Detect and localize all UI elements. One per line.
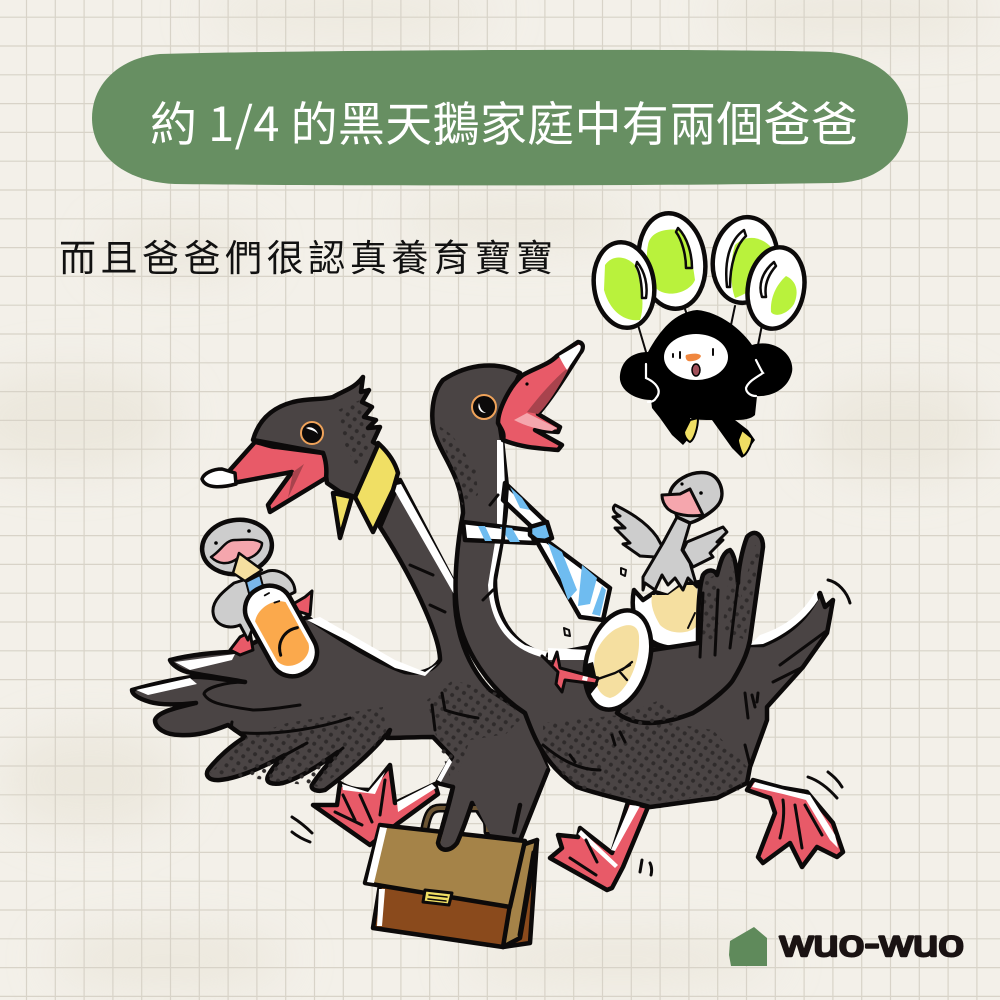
bottle <box>237 577 325 685</box>
baby swan on egg <box>613 473 727 590</box>
baby swan with bottle <box>199 515 325 685</box>
white highlights: left swan <box>136 484 455 782</box>
baby beak <box>662 489 703 516</box>
rear foot: right swan <box>747 780 843 867</box>
small motion marks <box>292 580 850 875</box>
beak: right swan <box>498 342 583 450</box>
balloon strings <box>638 300 762 352</box>
logo house icon <box>729 927 767 966</box>
baby arms and body <box>213 570 295 640</box>
head, neck and body <box>432 365 833 807</box>
briefcase lower <box>373 840 537 947</box>
tie <box>463 483 610 620</box>
leg and foot: left swan <box>313 765 438 845</box>
balloons <box>588 209 811 333</box>
black body <box>620 310 792 458</box>
feather lines: right swan <box>483 495 825 770</box>
large egg <box>573 602 663 718</box>
nipple <box>233 553 262 581</box>
right swan (front) <box>432 342 833 807</box>
wing feather lines <box>204 565 478 755</box>
neck white stripe <box>488 440 818 660</box>
subtitle: 而且爸爸們很認真養育寶寶 <box>59 228 553 282</box>
briefcase handle <box>425 808 488 832</box>
baby wings <box>613 505 662 557</box>
baby head <box>670 473 722 523</box>
face <box>664 334 728 380</box>
baby head <box>199 515 275 579</box>
head shading <box>338 400 370 470</box>
foot highlights <box>342 772 436 812</box>
briefcase <box>365 808 537 947</box>
hand gripping briefcase <box>440 730 548 849</box>
wing: right swan <box>617 533 763 728</box>
face details <box>673 349 713 376</box>
logo wordmark: wuo-wuo <box>779 923 964 964</box>
left swan (rear) <box>132 480 548 851</box>
logo <box>729 923 964 966</box>
collar <box>333 443 398 538</box>
halftone shading: left swan <box>210 680 523 787</box>
eye: right swan <box>472 395 496 419</box>
right leg behind <box>550 780 843 890</box>
yellow feet <box>684 418 752 456</box>
tie blade <box>536 540 610 620</box>
neck edge over tie band <box>503 487 507 540</box>
halftone shading: right swan <box>438 425 747 803</box>
hand outline <box>438 770 548 850</box>
tie knot <box>530 522 552 543</box>
tie band <box>463 483 547 543</box>
hatched egg <box>633 582 700 648</box>
title banner: 約 1/4 的黑天鵝家庭中有兩個爸爸 <box>150 86 858 155</box>
eye <box>301 422 323 444</box>
briefcase clasp <box>423 890 452 905</box>
baby feet <box>230 591 312 655</box>
blue collar <box>246 575 264 597</box>
body and wing <box>132 480 548 851</box>
head: left swan <box>202 377 398 538</box>
baby body <box>643 517 697 590</box>
balloon creature <box>588 209 811 458</box>
briefcase flap <box>365 825 525 907</box>
motion droplets <box>564 568 626 636</box>
egg crack and red foot <box>542 652 632 695</box>
baby mouth <box>211 540 262 563</box>
briefcase side <box>503 840 537 947</box>
title banner <box>92 50 908 185</box>
white arm outlines <box>646 360 763 402</box>
lower foot: right swan <box>550 802 648 890</box>
beak <box>230 442 326 512</box>
